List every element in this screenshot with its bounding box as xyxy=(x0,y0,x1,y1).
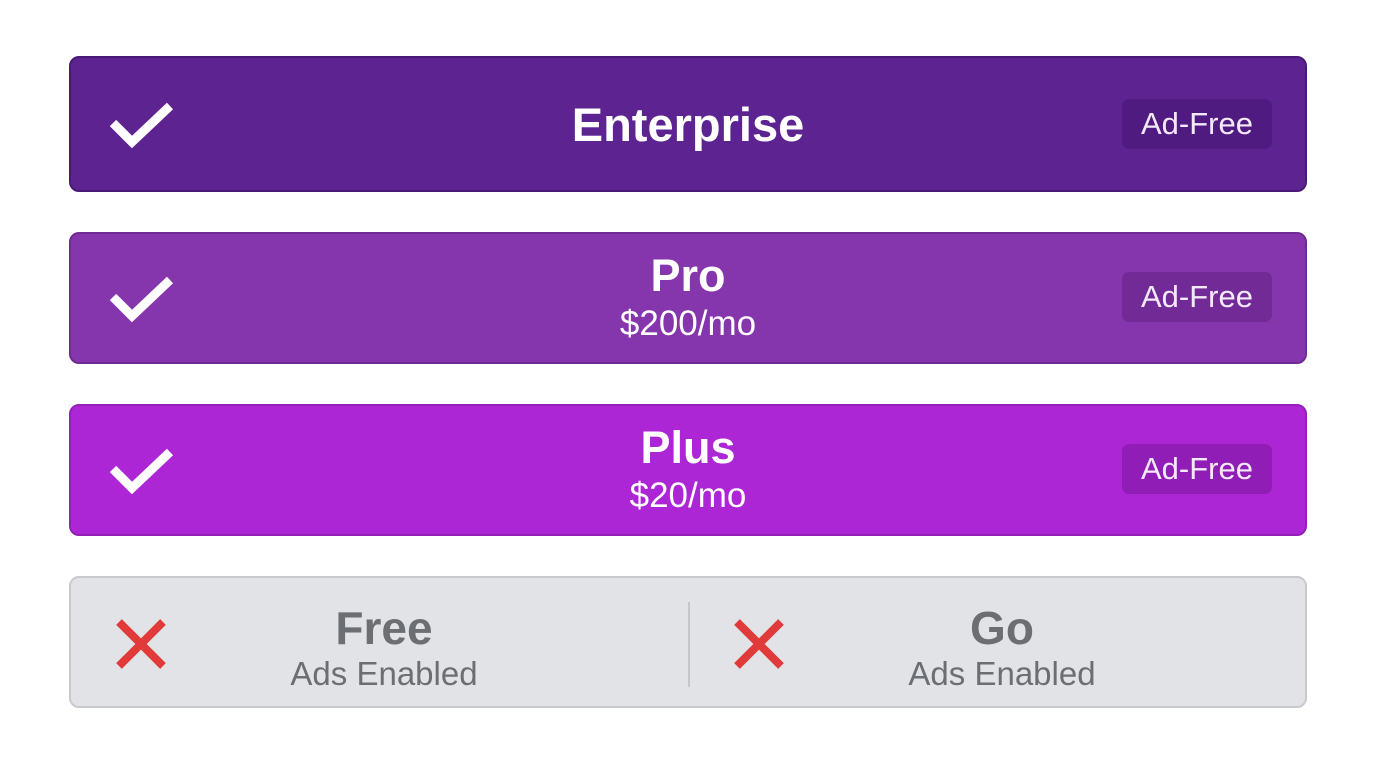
text: Ads Enabled: Ads Enabled xyxy=(290,655,478,692)
text: Free: Free xyxy=(335,602,433,654)
panel: Pro xyxy=(69,232,1307,364)
text: Ads Enabled: Ads Enabled xyxy=(908,655,1096,692)
heading: Enterprise: Enterprise xyxy=(572,98,804,151)
icon: x go xyxy=(734,619,784,669)
text: Pro: Pro xyxy=(650,250,726,301)
text: Plus: Plus xyxy=(640,422,736,473)
badge: Ad-Free xyxy=(1141,451,1253,486)
panel: Plus xyxy=(69,404,1307,536)
text: price: $200/mo xyxy=(620,304,756,343)
panel: Free / Go xyxy=(69,576,1307,708)
badge: Ad-Free xyxy=(1141,106,1253,141)
panel: Enterprise xyxy=(69,56,1307,192)
badge xyxy=(1122,272,1272,322)
badge: Ad-Free xyxy=(1141,279,1253,314)
badge xyxy=(1122,444,1272,494)
text: price: $20/mo xyxy=(630,476,746,515)
icon: x free xyxy=(116,619,166,669)
icon: check xyxy=(110,102,173,148)
icon: check xyxy=(110,276,173,322)
icon: check xyxy=(110,448,173,494)
badge xyxy=(1122,99,1272,149)
text: Go: Go xyxy=(970,602,1034,654)
